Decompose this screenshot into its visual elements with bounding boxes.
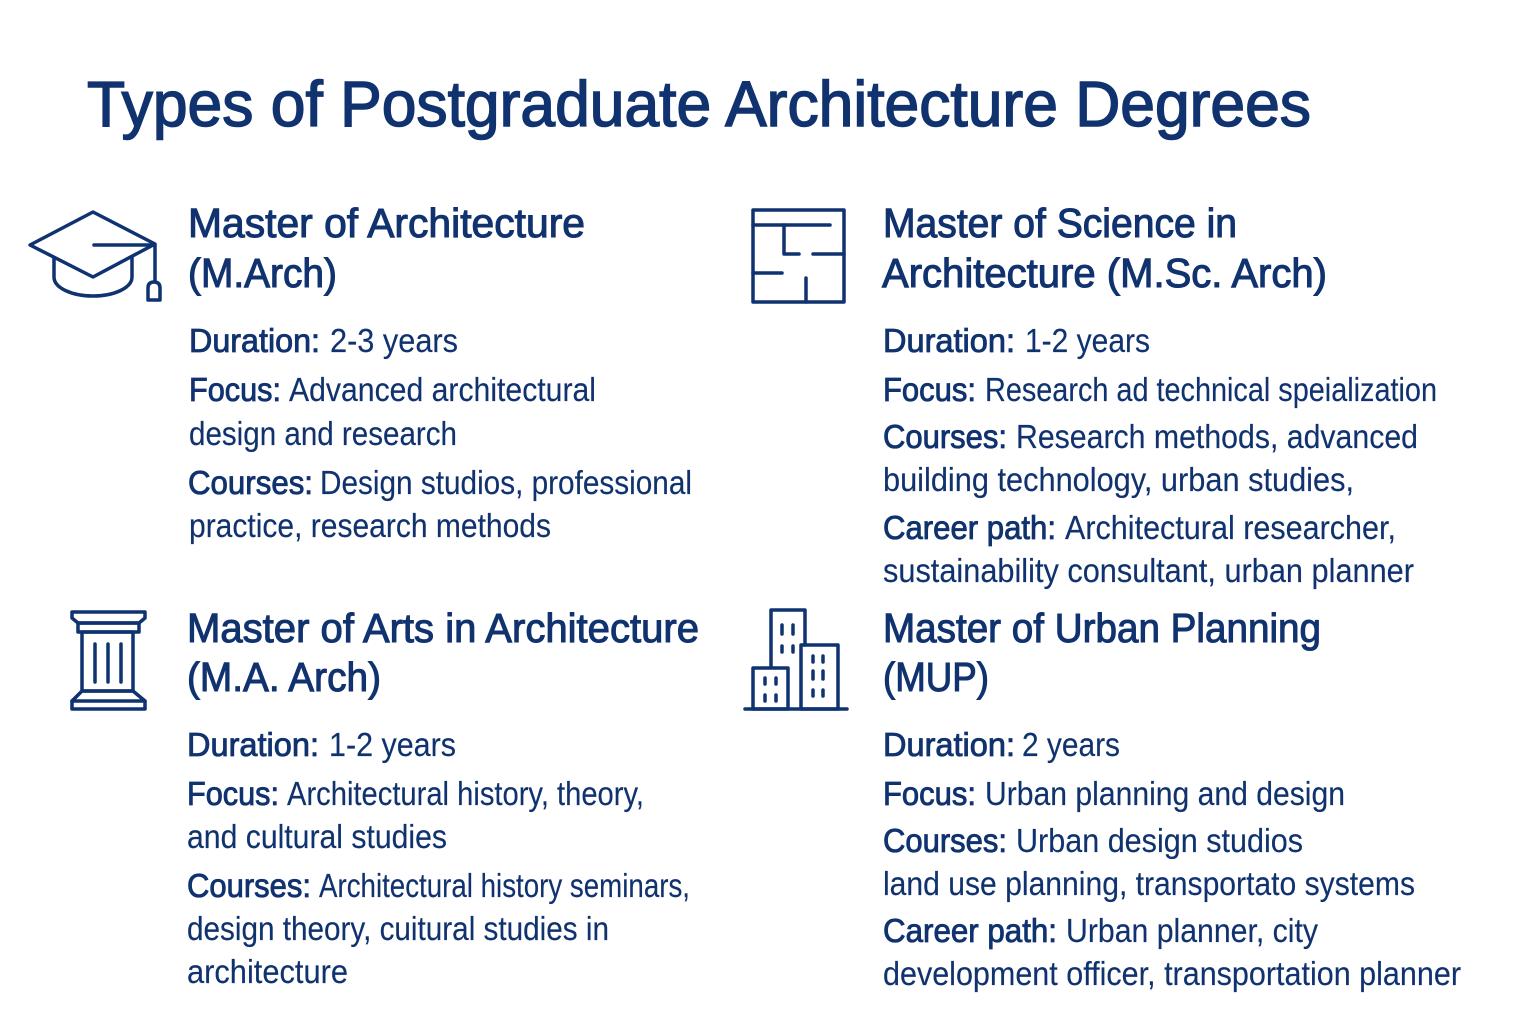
details: Master of Urban Planning: Urban planning and design bbox=[985, 775, 1345, 812]
panel: Master of Architecture bbox=[30, 200, 692, 544]
heading: Master of Urban Planning: Master of Urban Planning bbox=[883, 605, 1321, 651]
details: Master of Architecture: design and research bbox=[189, 415, 457, 452]
heading: Master of Architecture: (M.Arch) bbox=[188, 250, 337, 296]
details: Master of Arts in Architecture: Architectural history seminars, bbox=[319, 867, 690, 904]
details: Master of Arts in Architecture: Focus: bbox=[187, 775, 279, 812]
details: Master of Architecture: 2-3 years bbox=[330, 322, 458, 359]
details: Master of Science in Architecture bbox=[883, 322, 1437, 589]
details: Master of Architecture: Design studios, professional bbox=[320, 464, 692, 501]
details: Master of Arts in Architecture: design theory, cuitural studies in bbox=[187, 910, 609, 947]
icon: classical column bbox=[72, 612, 145, 709]
panel: Master of Arts in Architecture bbox=[72, 605, 699, 990]
details: Master of Arts in Architecture: and cultural studies bbox=[187, 818, 447, 855]
heading: Master of Urban Planning bbox=[883, 605, 1321, 700]
details: Master of Urban Planning: development officer, transportation planner bbox=[883, 955, 1461, 992]
heading: Master of Science in Architecture bbox=[882, 200, 1327, 296]
details: Master of Science in Architecture: building technology, urban studies, bbox=[883, 461, 1354, 498]
details: Master of Architecture: Duration: bbox=[189, 322, 320, 359]
panel: Master of Urban Planning bbox=[745, 605, 1461, 992]
details: Master of Science in Architecture: sustainability consultant, urban planner bbox=[883, 552, 1414, 589]
heading: Master of Arts in Architecture: (M.A. Arch) bbox=[187, 654, 381, 700]
details: Master of Arts in Architecture bbox=[187, 726, 690, 990]
details: Master of Science in Architecture: Architectural researcher, bbox=[1065, 509, 1396, 546]
details: Master of Science in Architecture: 1-2 years bbox=[1025, 322, 1150, 359]
icon: graduation cap bbox=[30, 212, 160, 300]
details: Master of Architecture bbox=[188, 322, 692, 544]
details: Master of Urban Planning: Focus: bbox=[883, 775, 976, 812]
heading: Master of Architecture bbox=[188, 200, 585, 296]
details: Master of Architecture: practice, research methods bbox=[189, 507, 551, 544]
title: Types of Postgraduate Architecture Degrees bbox=[87, 68, 1311, 140]
details: Master of Architecture: Courses: bbox=[188, 464, 313, 501]
details: Master of Urban Planning: Duration: bbox=[883, 726, 1015, 763]
details: Master of Arts in Architecture: Courses: bbox=[187, 867, 311, 904]
panel: Master of Science in Architecture bbox=[753, 200, 1437, 589]
details: Master of Science in Architecture: Research methods, advanced bbox=[1016, 418, 1418, 455]
details: Master of Science in Architecture: Research ad technical speialization bbox=[985, 371, 1437, 408]
details: Master of Urban Planning: land use planning, transportato systems bbox=[883, 865, 1415, 902]
details: Master of Urban Planning: Urban design studios bbox=[1016, 822, 1303, 859]
details: Master of Architecture: Advanced architectural bbox=[289, 371, 596, 408]
details: Master of Science in Architecture: Courses: bbox=[883, 418, 1007, 455]
icon: floor plan bbox=[753, 210, 844, 302]
heading: Master of Architecture: Master of Architecture bbox=[188, 200, 585, 246]
details: Master of Arts in Architecture: Architectural history, theory, bbox=[287, 775, 644, 812]
details: Master of Architecture: Focus: bbox=[189, 371, 281, 408]
heading: Master of Science in Architecture: Master of Science in bbox=[883, 200, 1237, 246]
details: Master of Science in Architecture: Duration: bbox=[883, 322, 1015, 359]
details: Master of Urban Planning: Urban planner, city bbox=[1066, 912, 1318, 949]
details: Master of Science in Architecture: Career path: bbox=[883, 509, 1056, 546]
heading: Master of Urban Planning: (MUP) bbox=[883, 654, 989, 700]
icon: city buildings bbox=[745, 610, 847, 709]
details: Master of Urban Planning bbox=[883, 726, 1461, 992]
details: Master of Science in Architecture: Focus: bbox=[883, 371, 976, 408]
details: Master of Arts in Architecture: 1-2 years bbox=[329, 726, 456, 763]
heading: Master of Science in Architecture: Architecture (M.Sc. Arch) bbox=[882, 250, 1327, 296]
details: Master of Arts in Architecture: Duration: bbox=[187, 726, 319, 763]
details: Master of Urban Planning: Career path: bbox=[883, 912, 1057, 949]
details: Master of Urban Planning: 2 years bbox=[1022, 726, 1120, 763]
details: Master of Urban Planning: Courses: bbox=[883, 822, 1007, 859]
heading: Master of Arts in Architecture bbox=[187, 605, 699, 700]
heading: Master of Arts in Architecture: Master of Arts in Architecture bbox=[187, 605, 699, 651]
details: Master of Arts in Architecture: architecture bbox=[187, 953, 348, 990]
